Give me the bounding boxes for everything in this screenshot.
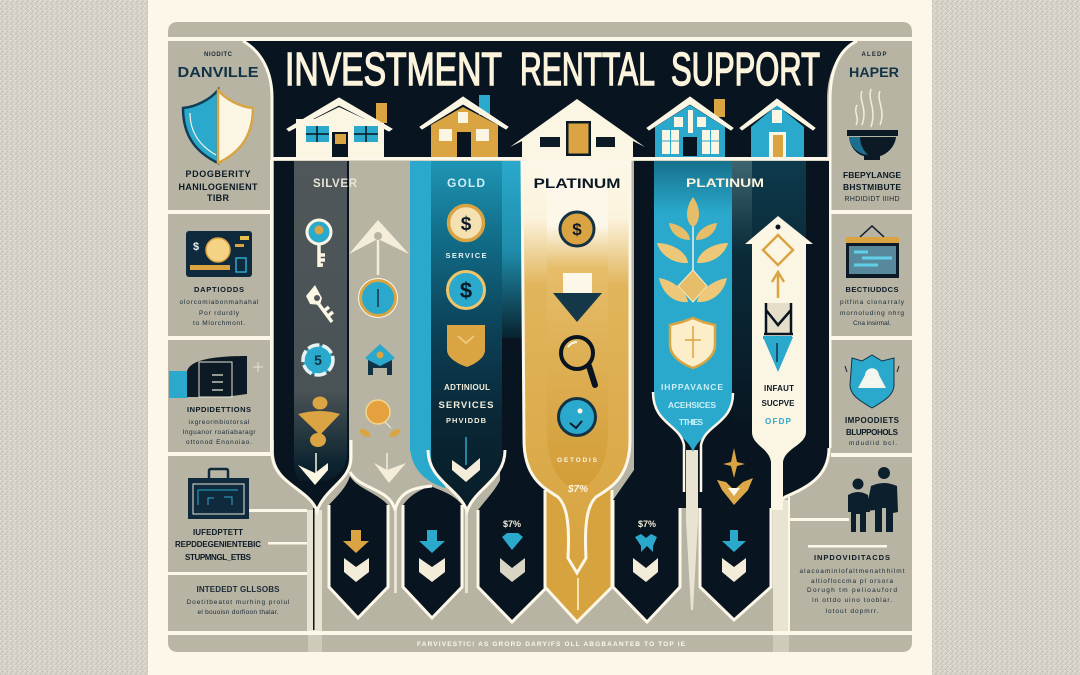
panel: schedule: [840, 226, 905, 327]
textured left margin: [0, 0, 148, 675]
base panel area: [168, 41, 912, 631]
icon: chevron: [500, 558, 525, 582]
title: [285, 43, 820, 95]
caption: IMPOODIETS: [845, 416, 900, 425]
caption: IUFEDPTETT: [193, 528, 243, 537]
column: gold tier centre: [431, 161, 502, 511]
icon: briefcase: [188, 469, 249, 519]
icon: blue shield: [845, 355, 899, 408]
panel: improvements: [845, 355, 900, 447]
caption: ADTINIOUL: [444, 383, 490, 392]
caption: DAPTIODDS: [194, 285, 244, 294]
panel: Danville: TIBR: [207, 193, 230, 203]
icon: blue coin: [558, 398, 596, 436]
column: blue gold-tier backing: [502, 161, 522, 340]
left panel separators: [168, 160, 912, 635]
column: platinum: [522, 161, 630, 573]
heading: INTEDEDT GLLSOBS: [196, 585, 280, 594]
icon: blue star: [635, 534, 657, 552]
caption: SERVICE: [446, 251, 486, 260]
gold column outline: [428, 450, 505, 511]
caption: INPDOVIDITACDS: [814, 553, 890, 562]
panel: deposits: olorcomiabonmahahal: [180, 299, 259, 306]
icon: blue gem: [502, 533, 523, 550]
price: $7%: [567, 484, 588, 495]
icon: blue coin: [448, 272, 484, 308]
icon: blue triangle: [763, 336, 793, 372]
panel: people: In ottdo uino tooblar.: [812, 597, 892, 604]
title: RENTTAL: [520, 43, 655, 95]
icon: down arrow: [452, 437, 480, 482]
caption: FBEPYLANGE: [843, 170, 901, 180]
tan column content: [349, 220, 409, 483]
panel: Danville: HANILOGENIENT: [178, 182, 258, 192]
panel: deposits: [180, 231, 259, 327]
column: dark joining strip: [500, 338, 530, 518]
icon: gold shield: [670, 318, 715, 368]
caption: PDOGBERITY: [186, 169, 250, 179]
icon: star coin: 5: [314, 352, 322, 368]
icon: frame: [764, 303, 793, 334]
column: teal light band: [732, 161, 752, 251]
right block outline: [777, 448, 829, 505]
column: platinum blue strip: TTHIES: [679, 418, 704, 427]
panel: schedule: Cna insirmal.: [853, 320, 891, 327]
top band: [168, 22, 912, 37]
panel: Haper: RHDIDIDT IIIHD: [844, 196, 900, 203]
panel: inspections: ottonod Enonoiao.: [186, 439, 252, 446]
panel: representation: STUPMNGL_ETBS: [185, 553, 252, 562]
icon: hand with paper: [169, 356, 263, 398]
title: SUPPORT: [671, 43, 820, 95]
panel: people: alacoaminlofaltmenathhilmt: [800, 568, 905, 575]
icon: blue coin: [358, 278, 398, 318]
icon: gold arrow: [343, 530, 369, 553]
panel: deposits: to Mlorchmont.: [193, 320, 245, 327]
caption: OETODIS: [557, 457, 598, 464]
icon: chevron: [419, 558, 445, 582]
icon: gold coin: $: [461, 214, 472, 235]
column: platinum blue strip: [653, 161, 764, 492]
panel: people: altiofloccma pl orsora: [811, 578, 893, 585]
heading: DANVILLE: [178, 64, 258, 81]
right panel separators: [788, 210, 912, 632]
tier column backings: [274, 161, 829, 518]
icon: angled key: [306, 285, 333, 322]
silver column content: [298, 178, 358, 485]
panel: people: [800, 467, 905, 615]
icon: gold diamond: [763, 235, 793, 265]
icon: shield: [183, 90, 253, 163]
caption: ALEDP: [862, 52, 886, 58]
house: blue small: [740, 99, 815, 157]
caption: INFAUT: [764, 384, 794, 393]
house: blue large: [647, 97, 733, 157]
caption: Doetitbeatot murhing prolul: [186, 599, 290, 606]
icon: house arrow: [349, 220, 409, 275]
shield: platinum base: [545, 480, 612, 622]
icon: blue arrow: [722, 530, 746, 552]
icon: dollar coin: $: [572, 220, 582, 239]
panel: representation: REPDDEGENIENTEBIC: [175, 540, 261, 549]
panel: Haper: [843, 52, 901, 203]
icon: gold coin: [448, 206, 484, 240]
right panel curve outline: [830, 41, 857, 448]
icon: hanging board: [846, 226, 899, 278]
icon: small house: [365, 344, 395, 375]
column: arrow card: [745, 216, 813, 510]
shield: tan base: [403, 486, 462, 618]
house: platinum: [510, 99, 645, 161]
column: blue left strip: [410, 161, 435, 451]
heading: HAPER: [849, 65, 899, 80]
panel: inspections: Inguanor roatiabaragr: [182, 429, 256, 436]
gold tier content: [438, 176, 494, 482]
panel: inspections: ixgreormbiotorsal: [188, 419, 250, 426]
price: $7%: [503, 519, 521, 529]
house: gold: [420, 95, 508, 157]
column: platinum blue strip: ACEHSICES: [668, 400, 716, 410]
gold tier content: PHVIDDB: [446, 416, 487, 425]
icon: gold coin with pods: [358, 400, 402, 439]
icon: two people: [848, 467, 898, 532]
textured right margin: [932, 0, 1080, 675]
icon: dollar coin: [560, 212, 594, 246]
house: silver: [287, 98, 392, 157]
shield: gold tier base: [478, 470, 547, 622]
icon: gold chevron ornament: [298, 396, 340, 447]
icon: chevron: [344, 558, 369, 582]
icon: magnifier: [561, 337, 595, 385]
title: INVESTMENT: [285, 43, 502, 95]
icon: chevron: [722, 558, 746, 582]
shield: silver base: [329, 476, 388, 618]
column: blue tongue curve: [410, 400, 445, 488]
icon: up arrow: [772, 272, 784, 298]
column: right dark block: [634, 161, 829, 508]
shield: final base: [700, 480, 771, 620]
label: PLATINUM: [686, 176, 764, 190]
icon: growing plant: [657, 197, 728, 302]
column: teal area: [732, 161, 806, 441]
icon: blue arrow: [419, 530, 445, 553]
icon: gold star and heart: [717, 448, 753, 505]
icon: blue coin: $: [460, 278, 472, 303]
label: GOLD: [447, 176, 485, 190]
gold tier content: SERVICES: [438, 400, 494, 411]
panel: people: lotout dopmrr.: [826, 608, 879, 615]
panel: representation: [175, 469, 261, 562]
column: silver dark: [274, 161, 349, 511]
panel: schedule: pitfina clonarraly: [840, 299, 905, 306]
icon: chevron: [633, 558, 658, 582]
label: PLATINUM: [534, 176, 620, 191]
panel: deposits: Por rdurdly: [199, 310, 240, 317]
icon: down arrow: [374, 453, 406, 483]
header divider: [272, 157, 522, 160]
icon: payment card: $: [193, 241, 199, 253]
silver column outline: [272, 440, 351, 511]
tan column outline: [350, 472, 432, 510]
shield: platinum right base: [613, 470, 680, 622]
icon: steaming bowl: [847, 89, 898, 160]
icon: gold shield: [447, 325, 485, 367]
panel: people: Dorugh tm pelioauford: [807, 587, 897, 594]
caption: BECTIUDDCS: [846, 285, 898, 294]
column: arrow card: OFDP: [765, 417, 792, 426]
platinum tongue connector lines: [577, 578, 579, 610]
caption: INPDIDETTIONS: [187, 405, 251, 414]
footer band: [168, 635, 912, 652]
header dark block: [243, 41, 857, 160]
price: $7%: [638, 519, 656, 529]
footer band: FARVIVESTIC! AS GRORD DARYIFS OLL ABGBAANTEB TO TOP IE: [417, 641, 686, 648]
vertical connector strips: [307, 450, 789, 631]
left panel curve outline: [243, 41, 272, 160]
icon: down arrow: [298, 453, 328, 485]
panel: interest: el bouoisn dorfioon thalar.: [198, 609, 279, 616]
column: arrow card: SUCPVE: [762, 399, 795, 408]
caption: IHPPAVANCE: [661, 382, 723, 392]
panel: Danville: [178, 52, 258, 203]
panel: inspections: [169, 356, 263, 446]
column: silver slate strip: [294, 161, 347, 481]
panel: improvements: BLUPPOHOLS: [846, 428, 899, 437]
panel: Haper: BHSTMIBUTE: [843, 182, 901, 192]
label: SILVER: [313, 178, 358, 190]
icon: star coin: [303, 345, 333, 375]
icon: key with blue head: [307, 220, 331, 267]
panel: schedule: mornoluding nhrg: [840, 310, 904, 317]
icon: down arrow: [553, 273, 602, 322]
panel: improvements: mdudiid bcl.: [849, 440, 897, 447]
icon: tag hole: [776, 224, 780, 230]
caption: NIODITC: [204, 52, 233, 58]
panel: interest: [186, 585, 290, 616]
